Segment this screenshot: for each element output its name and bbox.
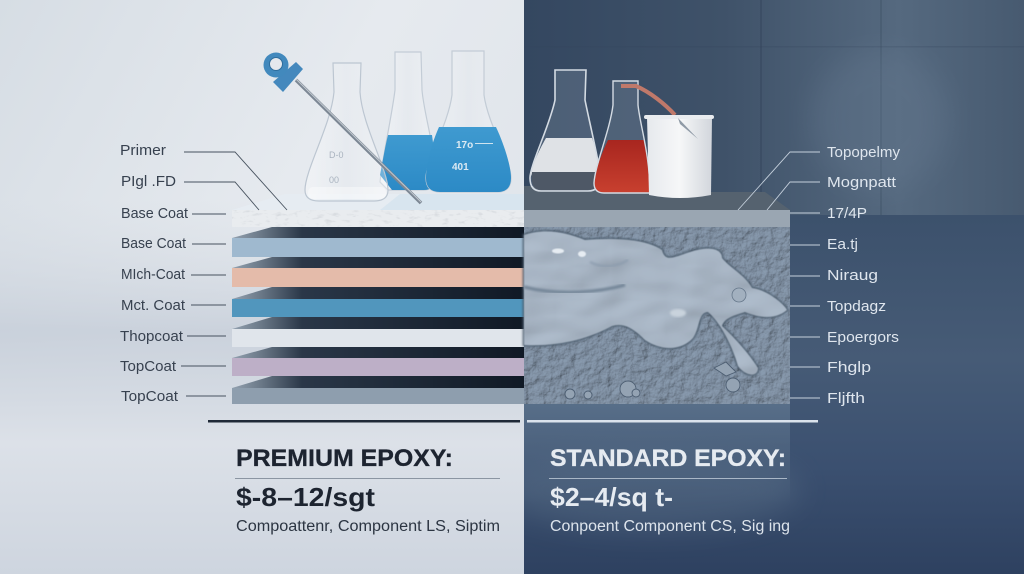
label: Eatj: Ea.tj [827,236,858,253]
label: Ninaug: Niraug [827,267,878,284]
label: Epoergors: Epoergors [827,329,899,346]
icon: red flask [594,81,650,193]
label: Topdagz [790,298,886,315]
price: standard: $2–4/sq t- [550,482,673,512]
label: base coat 1: Base Coat [121,205,189,222]
label: Topdagz: Topdagz [827,298,886,315]
icon: clear flask: D-0 [329,150,344,160]
premium epoxy layer stack [232,194,524,404]
layer: topcoat grey [232,376,524,404]
block top slab [524,210,790,227]
icon: blue flask with marks [426,51,511,192]
panel: premium side background [0,0,524,574]
label: Eatj [790,236,858,253]
heading: premium epoxy: PREMIUM EPOXY: [236,445,453,472]
label: topcoat 2 [121,388,226,405]
label: Ninaug [790,267,878,284]
label: base coat 2: Base Coat [121,235,187,252]
icon: blue flask with marks: 401 [452,162,469,173]
icon: clear flask [305,63,388,201]
label: base coat 2 [121,235,226,252]
label: topcoat 2: TopCoat [121,388,179,405]
label: Pigl FD [121,173,259,210]
label: Topopelmy [738,144,900,210]
layer: topcoat lilac [232,347,524,376]
wet epoxy spill [524,231,787,375]
icon: blue flask [380,52,435,190]
label: thopcoat [120,328,226,345]
label: 17/4P: 17/4P [827,205,867,222]
components: premium: Compoattenr, Component LS, Siptim [236,518,500,535]
icon: white paint pail [644,115,714,198]
label: Primer [120,142,287,210]
right labels with leader lines [738,144,900,407]
label: Mognpatt [767,174,897,210]
label: mid coat 1 [121,266,226,283]
block reflection [524,404,790,504]
icon: clear flask: 00 [329,175,339,185]
panel: standard epoxy summary [527,420,818,535]
icon: blue flask with marks: 17o [456,140,473,151]
layer: base coat blue [232,227,524,257]
label: Fhglp [790,359,871,376]
icon: stirring rod with blue handle [264,52,421,203]
label: Fljfth: Fljfth [827,390,865,407]
block top surface [524,186,790,210]
label: thopcoat: Thopcoat [120,328,184,345]
concrete rubble [565,362,740,399]
icon: clear flask with white liquid [530,70,600,191]
layer: marble top slab [232,194,524,227]
label: Mognpatt: Mognpatt [827,174,897,191]
panel: standard side background [500,0,1024,574]
label: Pigl FD: PIgl .FD [121,173,176,190]
price: premium: $-8–12/sgt [236,482,375,512]
label: topcoat 1: TopCoat [120,358,177,375]
layer: base coat peach [232,257,524,287]
label: Primer: Primer [120,142,166,159]
panel: premium epoxy summary [208,420,520,535]
label: base coat 1 [121,205,226,222]
label: mid coat 2: Mct. Coat [121,297,186,314]
label: mid coat 1: MIch-Coat [121,266,186,283]
concrete face [524,227,790,404]
layer: mid coat blue [232,287,524,317]
components: standard: Conpoent Component CS, Sig ing [550,518,790,535]
label: Fljfth [790,390,865,407]
icon: red tube [621,86,675,115]
label: Epoergors [790,329,899,346]
label: Topopelmy: Topopelmy [827,144,900,161]
label: Fhglp: Fhglp [827,359,871,376]
layer: topcoat white [232,317,524,347]
panel: standard epoxy concrete block [524,186,790,504]
label: topcoat 1 [120,358,226,375]
left labels with leader lines [120,142,287,405]
heading: standard epoxy: STANDARD EPOXY: [550,445,786,472]
label: 17/4P [790,205,867,222]
label: mid coat 2 [121,297,226,314]
